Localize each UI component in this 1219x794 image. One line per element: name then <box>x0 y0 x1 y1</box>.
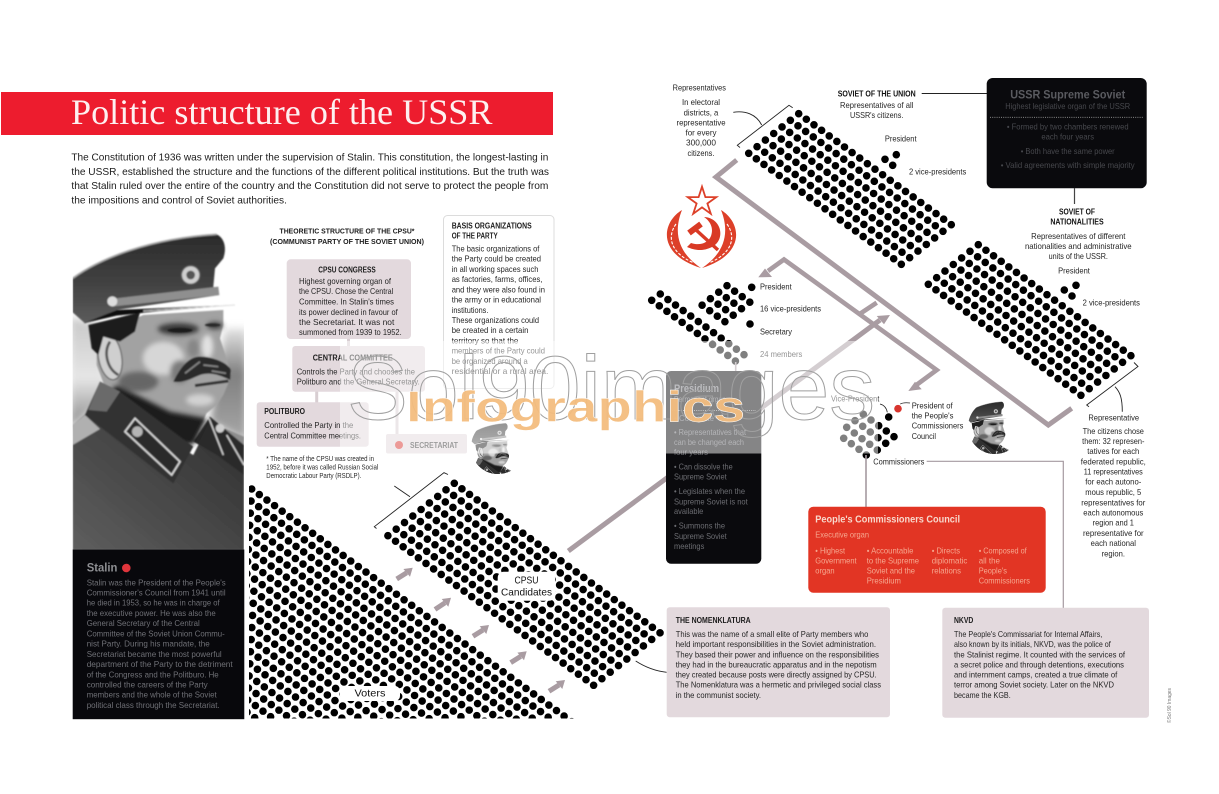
bracket: representatives leader <box>733 105 793 148</box>
text: Soviet of the Union: President <box>885 134 917 144</box>
panel: People's Commissioners Council: • Highest <box>815 545 846 555</box>
heading: Stalin: Stalin <box>87 563 117 575</box>
panel: People's Commissioners Council: Executive organ <box>815 529 869 539</box>
label: Voters: Voters <box>354 688 386 700</box>
watermark: Infographics: Infographics <box>406 382 745 432</box>
label: CPSU Candidates: CPSU <box>514 574 538 586</box>
text: Soviet of Nationalities <box>1025 208 1140 308</box>
text: Stalin biography: department of the Party to the detriment <box>87 659 233 669</box>
panel: The Nomenklatura: The Nomenklatura was a hermetic and privileged social class <box>676 680 881 690</box>
panel: Stalin biography <box>73 550 244 719</box>
panel: CPSU Congress: CPSU CONGRESS <box>318 266 376 275</box>
dots: CPSU candidates <box>388 483 660 685</box>
panel: The Nomenklatura: held important responsibilities in the Soviet administration. <box>676 639 876 649</box>
arrow: representatives line <box>716 160 1072 425</box>
footnote: * The name of the CPSU was created in <box>266 456 374 463</box>
panel: basis organizations of the party: and they were also found in <box>452 284 545 294</box>
text: Stalin biography: Committee of the Soviet Union Commu- <box>87 628 225 638</box>
label: President of the People's Commissioners Council: President of <box>912 400 953 410</box>
panel: NKVD: NKVD <box>954 616 974 625</box>
panel: Presidium: Supreme Soviet is not <box>674 496 748 506</box>
panel: Presidium: • Legislates when the <box>674 486 745 496</box>
panel: People's Commissioners Council: • Composed of <box>979 545 1027 555</box>
photo: Stalin small, Commissioners <box>968 402 1008 454</box>
text: representatives: citizens. <box>688 148 714 158</box>
panel: basis organizations of the party: in all working spaces such <box>452 264 539 274</box>
panel: basis organizations of the party: as factories, farms, offices, <box>452 274 542 284</box>
panel: basis organizations of the party: the army or in educational <box>452 295 541 305</box>
dots: voters <box>249 485 574 718</box>
panel: Presidium: four years <box>674 447 708 457</box>
text: representative of nationalities: representatives for <box>1081 497 1145 507</box>
text: representative of nationalities: 11 representatives <box>1084 467 1143 477</box>
text: representative of nationalities: representative for <box>1083 528 1144 538</box>
text: Soviet of the Union: SOVIET OF THE UNION <box>838 89 916 98</box>
panel: basis organizations of the party: OF THE PARTY <box>452 232 498 241</box>
panel: NKVD: a secret police and through detentions, executions <box>954 659 1124 669</box>
panel: Politburo: POLITBURO <box>264 407 305 416</box>
text: Stalin biography: of the Congress and the Politburo. He <box>87 669 219 679</box>
panel: CPSU Congress: summoned from 1939 to 1952. <box>299 327 402 337</box>
text: representative of nationalities: The citizens chose <box>1083 426 1144 436</box>
text: Soviet of Nationalities: nationalities and administrative <box>1025 241 1132 251</box>
panel: The Nomenklatura <box>667 607 890 717</box>
panel: Politburo: Central Committee meetings. <box>264 430 361 440</box>
panel: People's Commissioners Council: relations <box>932 566 961 576</box>
label: Voters <box>340 686 400 701</box>
panel: People's Commissioners Council: • Accountable <box>867 545 914 555</box>
connector: Commissioners to Council <box>865 455 867 507</box>
panel: basis organizations of the party: institutions. <box>452 305 488 315</box>
panel: Presidium: Supreme Soviet <box>674 531 727 541</box>
panel: Presidium: • Can dissolve the <box>674 462 733 472</box>
panel: Presidium: • Summons the <box>674 521 725 531</box>
panel: Central Committee: Politburo and the General Secretary. <box>297 376 420 386</box>
panel: Presidium: • Collegiate <box>674 413 714 423</box>
panel: The Nomenklatura: They based their power and influence on the responsibilities <box>676 649 879 659</box>
panel: Central Committee: CENTRAL COMMITTEE <box>313 354 393 363</box>
text: Presidium member labels: 16 vice-presidents <box>760 304 821 314</box>
panel: NKVD: the Stalinist regime. It counted with the services of <box>954 649 1126 659</box>
text: representative of nationalities: them: 32 represen- <box>1082 436 1145 446</box>
panel: People's Commissioners Council: • Directs <box>932 545 960 555</box>
text: representative of nationalities: federated republic, <box>1081 456 1146 466</box>
text: Stalin biography: the executive power. He was also the <box>87 608 216 618</box>
panel: People's Commissioners Council: Government <box>815 556 857 566</box>
panel: USSR Supreme Soviet: USSR Supreme Soviet <box>1010 87 1125 101</box>
panel: People's Commissioners Council: Commissioners <box>979 576 1030 586</box>
label: CPSU Candidates: Candidates <box>501 586 552 598</box>
label: President of the People's Commissioners Council <box>912 400 963 441</box>
panel: USSR Supreme Soviet: • Both have the same power <box>1021 146 1115 156</box>
panel: CPSU Congress: the CPSU. Chose the Central <box>299 286 393 296</box>
label: President of the People's Commissioners Council: the People's <box>912 411 953 421</box>
panel: basis organizations of the party: be organized around a <box>452 356 528 366</box>
panel: NKVD: became the KGB. <box>954 690 1011 700</box>
text: representatives: districts, a <box>684 107 719 117</box>
footnote <box>266 456 379 480</box>
icon: hammer and sickle <box>687 217 720 250</box>
panel: CPSU Congress: Highest governing organ of <box>299 276 392 286</box>
panel: basis organizations of the party: territory so that the <box>452 336 519 346</box>
panel: CPSU Congress: Committee. In Stalin's times <box>299 296 394 306</box>
text: representatives: 300,000 <box>686 138 716 148</box>
text: Soviet of the Union: 2 vice-presidents <box>909 166 966 176</box>
text: representative of nationalities <box>1081 412 1146 558</box>
panel: NKVD: terror among Soviet society. Later on the NKVD <box>954 680 1114 690</box>
panel: People's Commissioners Council: Presidium <box>867 576 901 586</box>
panel: Presidium: Supreme Soviet <box>674 472 727 482</box>
text: Stalin biography: political class through the Secretariat. <box>87 700 220 710</box>
connector: Presidium dots to box <box>735 362 737 371</box>
panel: Presidium: Presidium <box>674 383 719 395</box>
text: Soviet of Nationalities: Representatives of different <box>1031 231 1126 241</box>
text: Stalin biography: he died in 1953, so he was in charge of <box>87 598 220 608</box>
panel: basis organizations of the party: members of the Party could <box>452 346 545 356</box>
panel: Presidium: Permanent organ <box>674 394 726 404</box>
text: Soviet of Nationalities: 2 vice-presidents <box>1083 298 1140 308</box>
footnote: 1952, before it was called Russian Social <box>266 464 379 472</box>
panel: Secretariat: SECRETARIAT <box>410 441 458 450</box>
arrows: voters to candidates <box>397 568 565 691</box>
watermark veil <box>340 341 878 454</box>
panel: basis organizations of the party: BASIS ORGANIZATIONS <box>452 222 532 230</box>
photo: Stalin small, Secretariat <box>472 423 512 474</box>
text: Stalin biography: Stalin was the President of the People's <box>87 577 226 587</box>
watermark: Sol90images outline: Sol90images <box>347 339 875 439</box>
panel: People's Commissioners Council: organ <box>815 566 835 576</box>
panel: USSR Supreme Soviet <box>987 78 1147 188</box>
intro text: that Stalin ruled over the entire of the country and the Constitution did not serve to protect the people from <box>71 181 548 192</box>
icon: wreath <box>667 210 736 268</box>
text: representatives <box>673 82 726 158</box>
text: Soviet of the Union <box>838 89 966 176</box>
panel: The Nomenklatura: they had in the bureaucratic apparatus and in the nepotism <box>676 659 877 669</box>
panel: USSR Supreme Soviet: • Valid agreements with simple majority <box>1001 160 1135 170</box>
panel: The Nomenklatura: in the communist society. <box>676 690 761 700</box>
panel: basis organizations of the party: be created in a certain <box>452 325 529 335</box>
connectors between party organs <box>317 339 397 434</box>
panel: CPSU Congress <box>287 259 411 339</box>
panel: basis organizations of the party: The basic organizations of <box>452 244 540 254</box>
panel: People's Commissioners Council: People's <box>979 566 1007 576</box>
panel: The Nomenklatura: This was the name of a small elite of Party members who <box>676 629 869 639</box>
text: Soviet of Nationalities: NATIONALITIES <box>1050 218 1104 226</box>
connector: Commissioners to NKVD <box>927 461 1063 608</box>
panel: People's Commissioners Council: to the Supreme <box>867 556 919 566</box>
text: representative of nationalities: each autonomous <box>1083 507 1143 517</box>
dots: Union president and vice-presidents <box>881 151 900 169</box>
panel: USSR Supreme Soviet: each four years <box>1041 132 1094 142</box>
arrow: candidates to Supreme Soviet <box>568 315 890 551</box>
label: President of the People's Commissioners Council: Commissioners <box>912 421 963 431</box>
text: Stalin biography: General Secretary of the Central <box>87 618 200 628</box>
panel: Politburo <box>257 402 369 447</box>
heading: theoretic structure of the CPSU: THEORETIC STRUCTURE OF THE CPSU* <box>280 226 415 236</box>
text: Presidium member labels: 24 members <box>760 349 802 359</box>
panel: People's Commissioners Council: Soviet and the <box>867 566 915 576</box>
label: President of the People's Commissioners Council: Council <box>912 431 936 441</box>
text: representative of nationalities: mous republic, 5 <box>1085 487 1142 497</box>
panel: basis organizations of the party: the Party could be created <box>452 254 541 264</box>
dots: commissioners <box>840 405 902 459</box>
bracket: Nationalities leader <box>1087 362 1138 412</box>
text: Stalin biography: members and the whole of the Soviet <box>87 690 217 700</box>
intro text <box>71 152 549 206</box>
text: Stalin biography <box>87 577 233 710</box>
text: representatives: In electoral <box>682 97 720 107</box>
label: Commissioners: Commissioners <box>873 456 924 466</box>
leaders: vice-president and president <box>880 403 910 412</box>
dots: Nationalities president and vice-presidents <box>1060 282 1080 300</box>
dots: Soviet of Nationalities <box>928 245 1131 395</box>
text: Stalin biography: nist Party. During his mandate, the <box>87 639 210 649</box>
panel: Central Committee: Controls the Party and chooses the <box>297 366 415 376</box>
panel: People's Commissioners Council: diplomatic <box>932 556 967 566</box>
credit: ©Sol 90 Images <box>1166 688 1173 723</box>
panel: NKVD: also known by its initials, NKVD, was the police of <box>954 639 1111 649</box>
dots: Soviet of the Union <box>749 114 951 264</box>
text: Presidium member labels: President <box>760 282 792 292</box>
panel: The Nomenklatura: THE NOMENKLATURA <box>676 616 751 625</box>
panel: basis organizations of the party: These organizations could <box>452 315 539 325</box>
text: representative of nationalities: each national <box>1091 538 1136 548</box>
icon: star <box>688 187 716 214</box>
connector: Union to Supreme Soviet <box>922 92 987 94</box>
text: Stalin biography: controlled the careers of the Party <box>87 680 208 690</box>
panel: People's Commissioners Council: People's Commissioners Council <box>815 514 960 526</box>
text: Soviet of Nationalities: SOVIET OF <box>1059 208 1095 216</box>
panel: Presidium <box>666 371 761 564</box>
panel: NKVD: The People's Commissariat for Internal Affairs, <box>954 629 1102 639</box>
connector: Supreme Soviet to Nationalities <box>1074 188 1076 204</box>
panel: USSR Supreme Soviet: • Formed by two chambers renewed <box>1007 122 1129 132</box>
panel: Secretariat <box>386 434 467 454</box>
dots: Presidium <box>652 284 756 361</box>
heading: theoretic structure of the CPSU <box>270 226 424 246</box>
panel: Presidium: meetings <box>674 541 704 551</box>
text: representative of nationalities: tatives for each <box>1087 446 1140 456</box>
panel: CPSU Congress: its power declined in favour of <box>299 307 398 317</box>
icon: Soviet emblem <box>667 187 736 268</box>
panel: basis organizations of the party <box>444 216 554 388</box>
footnote: Democratic Labour Party (RSDLP). <box>266 473 361 480</box>
panel: CPSU Congress: the Secretariat. It was not <box>299 317 395 327</box>
panel: Presidium: • Representatives that <box>674 427 747 437</box>
label: CPSU Candidates <box>498 572 555 601</box>
text: Presidium member labels <box>760 282 821 359</box>
intro text: the impositions and control of Soviet authorities. <box>71 196 287 206</box>
panel: Politburo: Controlled the Party in the <box>264 420 354 430</box>
panel: Presidium: can be changed each <box>674 437 744 447</box>
panel: NKVD <box>942 608 1149 718</box>
text: Stalin biography: Commissioner's Council from 1941 until <box>87 588 226 598</box>
intro text: The Constitution of 1936 was written under the supervision of Stalin. This constitution, the longest-lasting in <box>71 152 548 164</box>
panel: People's Commissioners Council: all the <box>979 556 1000 566</box>
photo: Stalin portrait <box>70 234 247 550</box>
intro text: the USSR, established the structure and the functions of the different political institutions. But the truth was <box>71 167 549 178</box>
text: Soviet of the Union: USSR's citizens. <box>850 110 903 120</box>
panel: People's Commissioners Council <box>808 507 1046 593</box>
panel: Central Committee <box>292 346 425 392</box>
text: representative of nationalities: region and 1 <box>1093 518 1134 528</box>
arrow: Soviet to Presidium and Council <box>758 260 937 391</box>
panel: basis organizations of the party: residential or a rural area. <box>452 366 548 376</box>
text: Soviet of Nationalities: President <box>1058 266 1090 276</box>
text: representatives: for every <box>686 128 717 138</box>
label: Vice-President: Vice-President <box>831 394 880 404</box>
bracket: candidates leader <box>374 473 667 672</box>
text: Soviet of Nationalities: units of the USSR. <box>1049 251 1108 261</box>
heading: theoretic structure of the CPSU: (COMMUNIST PARTY OF THE SOVIET UNION) <box>270 237 424 246</box>
panel: Presidium: available <box>674 506 704 516</box>
title banner: Politic structure of the USSR <box>71 92 493 132</box>
text: representative of nationalities: region. <box>1102 548 1125 558</box>
text: Presidium member labels: Secretary <box>760 326 793 336</box>
text: Stalin biography: Secretariat became the most powerful <box>87 649 222 659</box>
text: Soviet of the Union: Representatives of all <box>840 100 913 110</box>
panel: NKVD: and internment camps, created a true climate of <box>954 669 1118 679</box>
text: representative of nationalities: for each autono- <box>1085 477 1141 487</box>
panel: The Nomenklatura: they created because posts were directly assigned by CPSU. <box>676 669 877 679</box>
text: representatives: Representatives <box>673 82 726 92</box>
text: representative of nationalities: Representative <box>1088 412 1139 422</box>
panel: USSR Supreme Soviet: Highest legislative organ of the USSR <box>1005 101 1130 111</box>
text: representatives: representative <box>676 118 726 128</box>
